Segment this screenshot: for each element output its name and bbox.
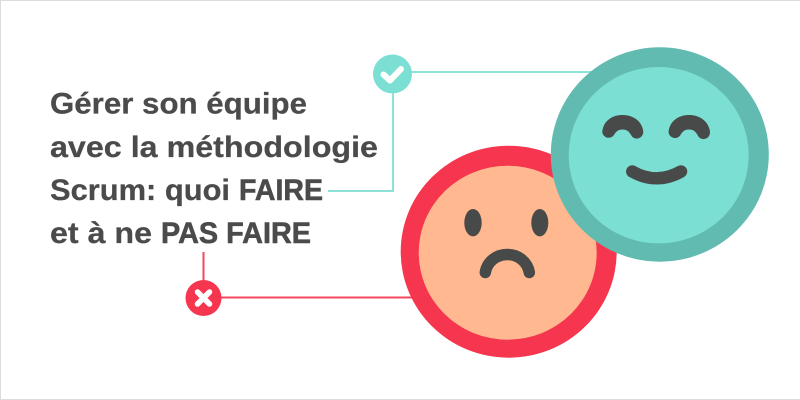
- connector: do line: [328, 72, 600, 191]
- title: avec la méthodologie: [50, 131, 378, 164]
- icon: cross badge: [186, 280, 222, 316]
- title: [50, 88, 378, 250]
- happy face: [551, 47, 769, 262]
- title: et à ne: [50, 217, 152, 250]
- title: Gérer son équipe: [50, 88, 307, 120]
- title: FAIRE: [239, 174, 323, 207]
- title: Scrum: quoi: [50, 174, 230, 207]
- sad face: [401, 146, 617, 358]
- title: PAS FAIRE: [161, 217, 311, 250]
- connector: don't line: [204, 252, 420, 298]
- icon: check badge: [373, 54, 412, 94]
